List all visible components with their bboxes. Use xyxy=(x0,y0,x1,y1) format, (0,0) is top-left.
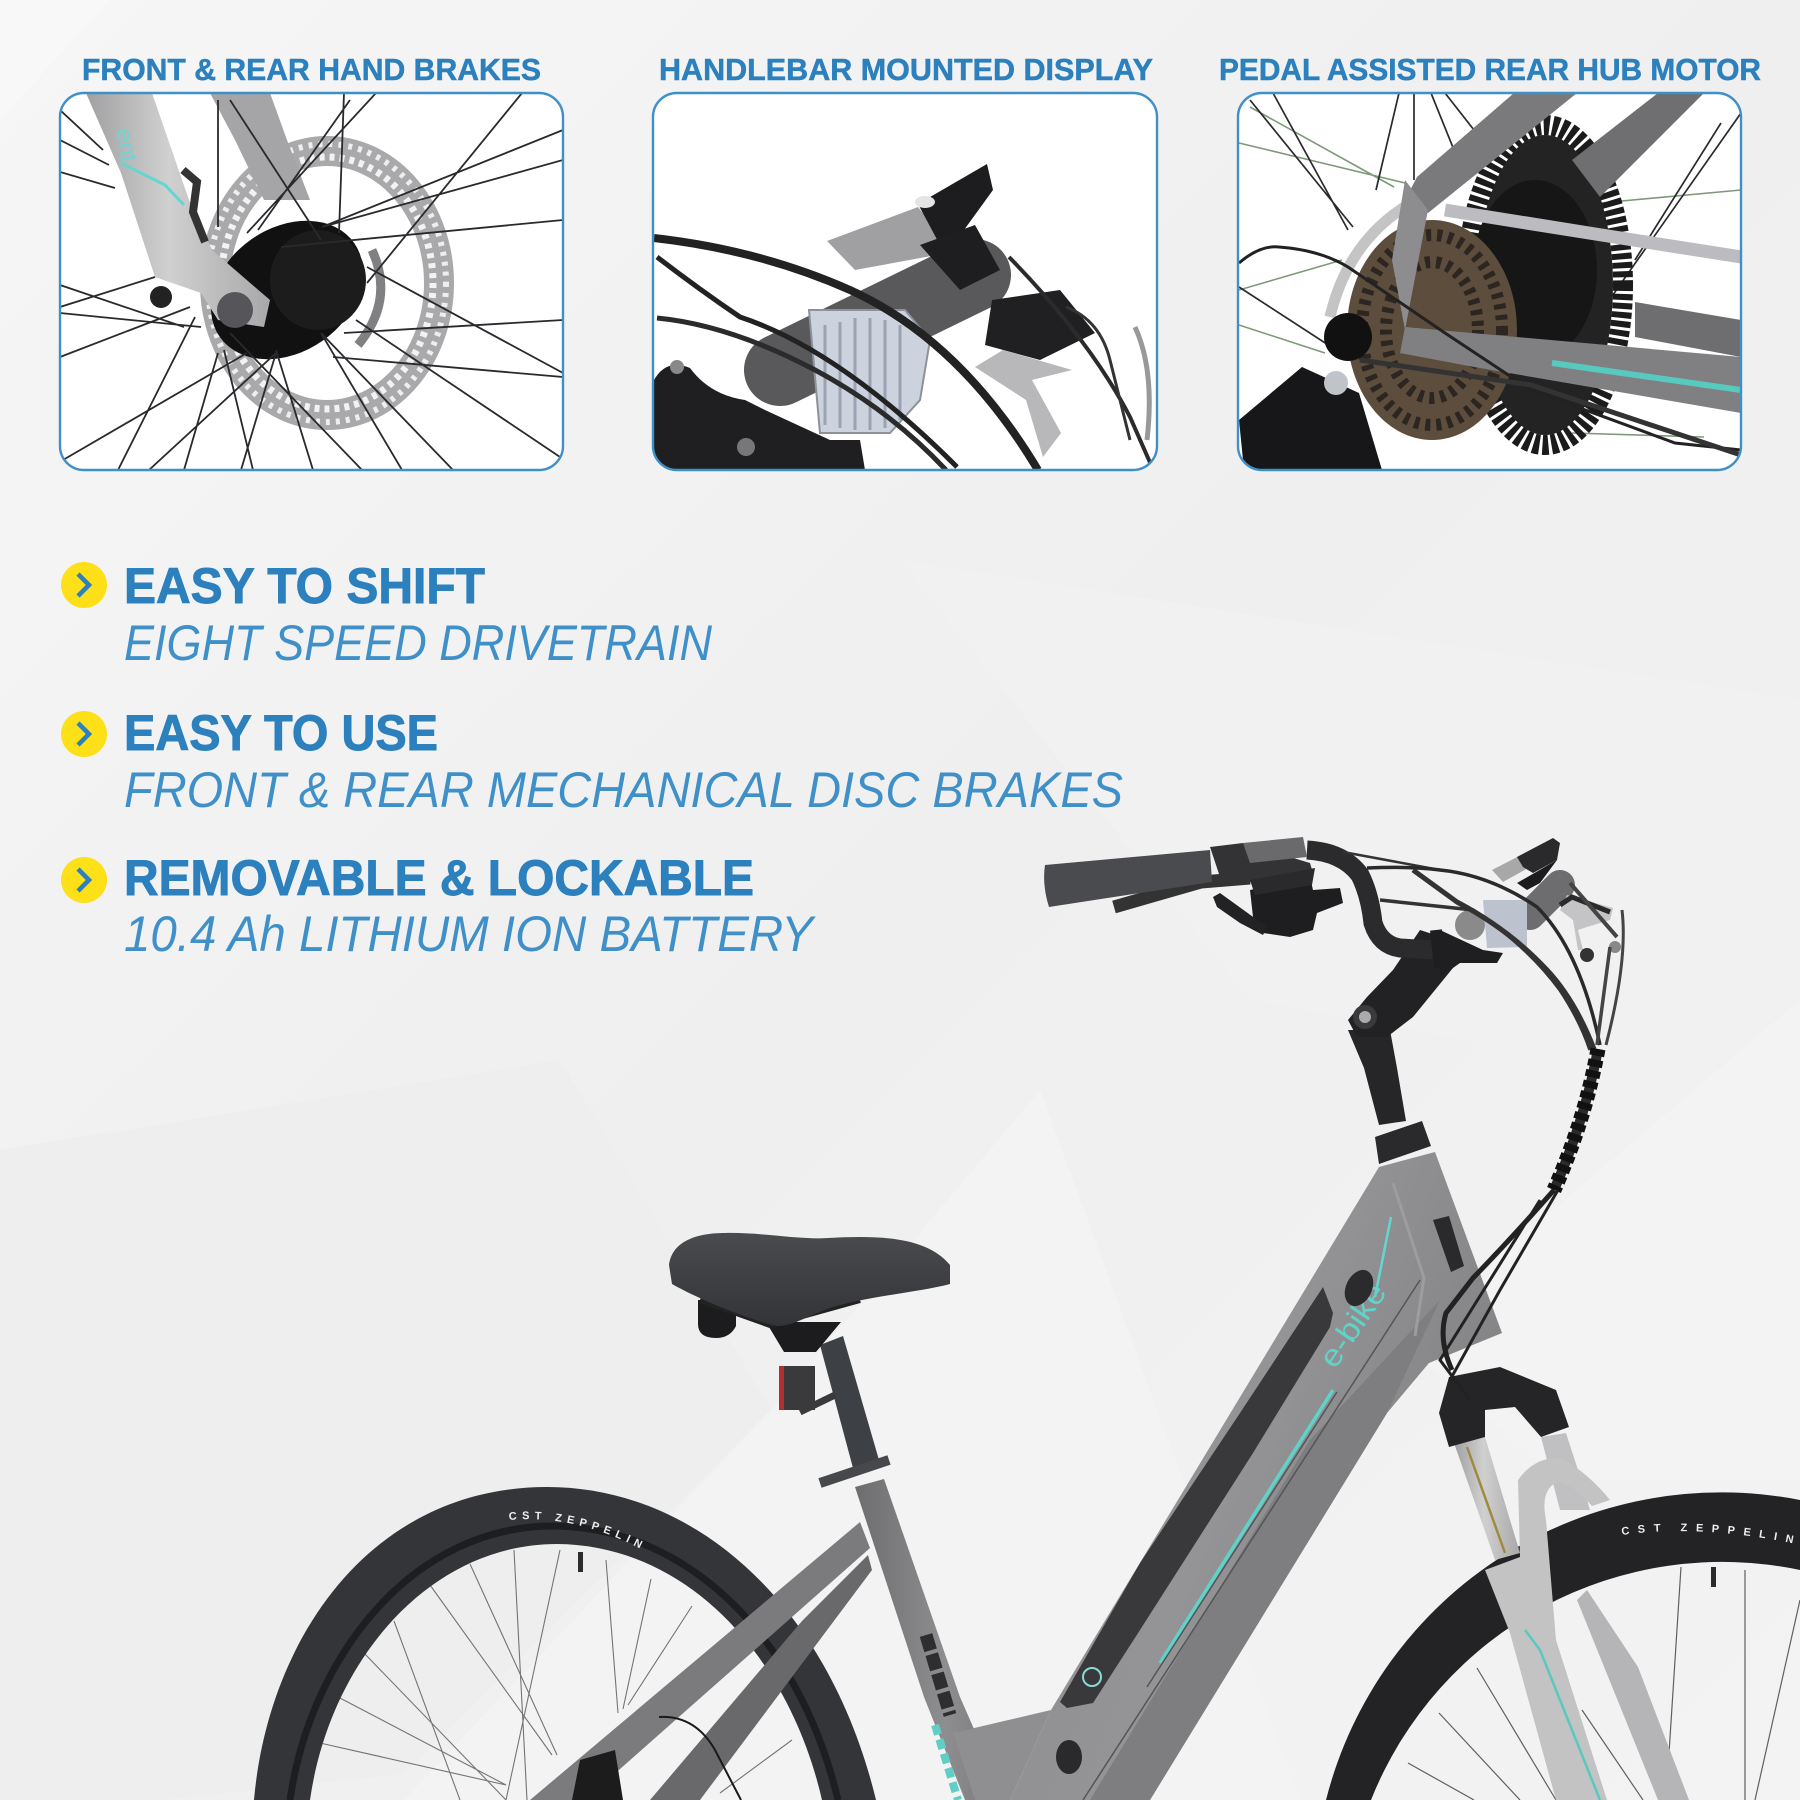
e-bike logo text: e-bike xyxy=(1312,1276,1393,1374)
brake and shifter cables xyxy=(1343,852,1623,1400)
photo: display and cables xyxy=(653,93,1157,470)
photo: disc brake and front hub: ent xyxy=(110,126,143,164)
feature: removable and lockable xyxy=(61,850,816,962)
headset and stem xyxy=(1348,930,1460,1164)
icon: yellow chevron bullet xyxy=(61,857,107,903)
feature heading: EASY TO USE xyxy=(124,705,438,761)
photo: rear hub motor and cassette xyxy=(1238,93,1741,470)
motor housing xyxy=(953,1710,1051,1800)
cyan stripe xyxy=(1160,1390,1333,1663)
feature heading: REMOVABLE & LOCKABLE xyxy=(124,850,754,906)
panel: front and rear hand brakes xyxy=(60,52,563,470)
feature list xyxy=(61,558,1123,962)
heading: handlebar mounted display: HANDLEBAR MOUNTED DISPLAY xyxy=(659,52,1153,87)
saddle xyxy=(669,1233,950,1352)
rear wheel xyxy=(254,1487,876,1800)
heading: pedal assisted rear hub motor: PEDAL ASSISTED REAR HUB MOTOR xyxy=(1219,52,1761,87)
feature: easy to use xyxy=(61,705,1123,818)
main down tube xyxy=(1010,1152,1502,1800)
front wheel xyxy=(1326,1492,1800,1800)
panel: pedal assisted rear hub motor xyxy=(1219,52,1761,470)
icon: yellow chevron bullet xyxy=(61,711,107,757)
photo: disc brake and front hub xyxy=(60,93,563,470)
feature: easy to shift xyxy=(61,558,713,671)
panel: handlebar mounted display xyxy=(653,52,1157,470)
rear frame tubes xyxy=(530,1479,1005,1800)
seat post and clamp xyxy=(820,1336,889,1483)
rear tyre lettering: CST ZEPPELIN xyxy=(509,1511,643,1548)
feature description: FRONT & REAR MECHANICAL DISC BRAKES xyxy=(124,762,1123,818)
handlebar display and reflector xyxy=(1440,838,1621,977)
handlebar with grip and controls xyxy=(1044,837,1440,968)
front suspension fork xyxy=(1439,1367,1689,1800)
feature description: EIGHT SPEED DRIVETRAIN xyxy=(124,615,713,671)
feature heading: EASY TO SHIFT xyxy=(124,558,485,614)
rear reflector xyxy=(779,1366,835,1412)
heading: front and rear hand brakes: FRONT & REAR HAND BRAKES xyxy=(82,52,541,87)
e-bike photo illustration xyxy=(254,837,1800,1800)
icon: yellow chevron bullet xyxy=(61,562,107,608)
battery cover strip xyxy=(1060,1287,1333,1708)
feature description: 10.4 Ah LITHIUM ION BATTERY xyxy=(124,906,816,962)
front tyre lettering: CST ZEPPELIN xyxy=(1622,1524,1794,1544)
